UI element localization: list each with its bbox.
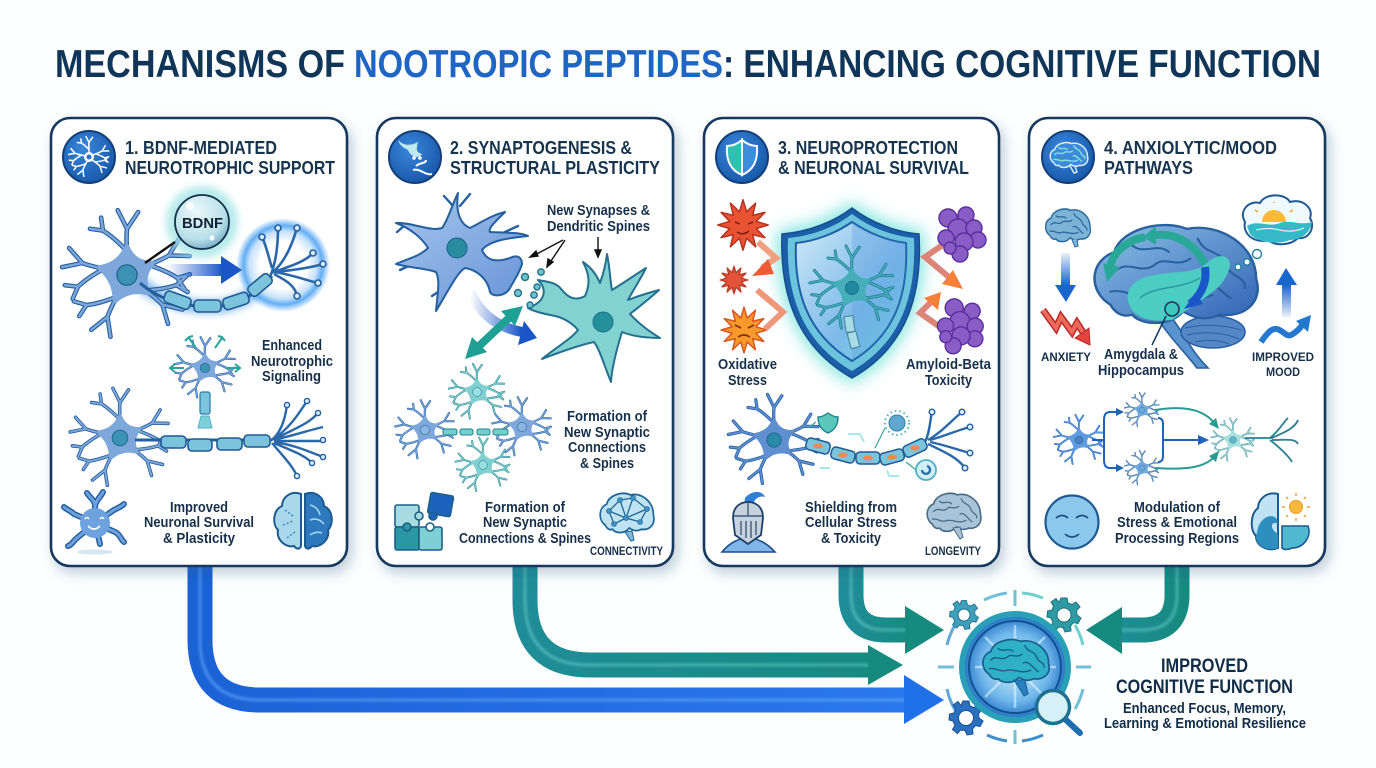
label: modulation of stress [1115, 500, 1239, 547]
icon: cell [916, 460, 936, 480]
magnifier [1036, 690, 1080, 733]
icon: synapse badge [389, 131, 441, 183]
label: new synapses and dendritic spines [547, 203, 650, 235]
label: new synapses and dendritic spines: Dendritic Spines [547, 219, 650, 235]
heading: 1. BDNF-MEDIATED [125, 137, 277, 158]
label: anxiety: ANXIETY [1041, 350, 1091, 364]
label: amyloid-beta toxicity [906, 357, 992, 389]
label: improved neuronal survival [144, 500, 254, 547]
heading: 3. NEUROPROTECTION [778, 137, 958, 158]
icon: calm face [1046, 496, 1098, 548]
label: oxidative stress: Stress [728, 373, 767, 389]
arrows: circular modulation [1103, 226, 1206, 309]
label: longevity: LONGEVITY [925, 544, 981, 558]
outcome text: improved cognitive function: Enhanced Focus, Memory, [1123, 701, 1286, 717]
icon: knight helmet [722, 492, 775, 552]
shield with neuron [778, 203, 923, 383]
arrow: anxiety zigzag [1043, 310, 1090, 345]
heading [778, 137, 969, 178]
heading: NEUROTROPHIC SUPPORT [125, 157, 336, 178]
icon: brain badge [1042, 131, 1094, 183]
label: formation of new synaptic connections: Connections [568, 440, 646, 456]
heading: 4. ANXIOLYTIC/MOOD [1104, 137, 1277, 158]
heading: 2. SYNAPTOGENESIS & [450, 137, 632, 158]
BDNF molecule: BDNF [182, 215, 223, 232]
small signaling neuron [170, 336, 240, 428]
title [55, 43, 1321, 86]
icon: smiling neuron [64, 492, 124, 554]
label: new synapses and dendritic spines: New Synapses & [547, 203, 650, 219]
central brain [1095, 225, 1258, 368]
outcome text: improved cognitive function: Learning & Emotional Resilience [1104, 716, 1306, 732]
panel 2: synaptogenesis and structural plasticity [377, 118, 673, 566]
label: enhanced neurotrophic signaling [251, 338, 333, 385]
outcome hub: brain with gears [938, 590, 1091, 744]
gears [949, 598, 1081, 735]
icon: puzzle [395, 492, 454, 550]
label: improved mood [1252, 350, 1314, 379]
neuron network [392, 364, 556, 492]
icon: connectivity brain [600, 493, 654, 541]
label: oxidative stress: Oxidative [718, 357, 777, 373]
label: shielding from cellular stress: Cellular Stress [805, 515, 897, 531]
long neuron [65, 388, 326, 487]
icon: shield badge [716, 131, 768, 183]
protected neuron [723, 394, 973, 485]
icon: anxious brain [1046, 209, 1090, 247]
label: modulation of stress: Stress & Emotional [1117, 515, 1237, 531]
outcome text: improved cognitive function: COGNITIVE FUNCTION [1116, 677, 1293, 698]
label: formation of connections and spines: Formation of [485, 500, 565, 516]
arrows: amyloid deflected [920, 242, 963, 327]
arrow: mood up [1276, 268, 1297, 317]
label: improved mood: IMPROVED [1252, 350, 1314, 364]
icon: wave brain with sun [1252, 493, 1310, 550]
label: enhanced neurotrophic signaling: Signaling [262, 369, 321, 385]
label: formation of new synaptic connections: & Spines [580, 456, 634, 472]
label: improved neuronal survival: & Plasticity [163, 531, 235, 547]
heading: STRUCTURAL PLASTICITY [450, 157, 661, 178]
icon: amyloid clusters [930, 207, 994, 362]
arrow: anxiety down [1055, 253, 1076, 302]
outcome text: improved cognitive function [1104, 656, 1306, 732]
heading [450, 137, 661, 178]
arrow: blue curved [470, 292, 537, 345]
icon: small shield [818, 413, 838, 433]
label: shielding from cellular stress [805, 500, 897, 547]
panel 4: anxiolytic and mood pathways [1029, 118, 1325, 566]
label: improved neuronal survival: Improved [170, 500, 228, 516]
label: improved neuronal survival: Neuronal Survival [144, 515, 254, 531]
label: amyloid-beta toxicity: Amyloid-Beta [906, 357, 992, 373]
presynaptic neuron [396, 193, 528, 311]
label: formation of connections and spines: Connections & Spines [459, 531, 591, 547]
label: improved mood: MOOD [1266, 365, 1300, 379]
icon: neuron badge [63, 131, 115, 183]
neural circuit diagram [1051, 392, 1298, 485]
label: modulation of stress: Modulation of [1134, 500, 1220, 516]
arrows: stress deflected [752, 242, 783, 329]
outcome text: improved cognitive function: IMPROVED [1161, 656, 1248, 677]
title: NOOTROPIC PEPTIDES [354, 43, 723, 86]
dashed ring [938, 590, 1091, 744]
hub disc [962, 614, 1068, 720]
label: connectivity: CONNECTIVITY [590, 544, 663, 558]
heading [125, 137, 336, 178]
label: enhanced neurotrophic signaling: Enhanced [262, 338, 322, 354]
label: formation of new synaptic connections [564, 409, 650, 472]
arrow: BDNF pathway to outcome [200, 560, 944, 724]
arrow: synaptogenesis pathway to outcome [525, 560, 903, 685]
label: amygdala and hippocampus [1098, 347, 1184, 379]
callout arrows: new synapses [530, 237, 601, 267]
label: formation of connections and spines: New Synaptic [483, 515, 567, 531]
label: enhanced neurotrophic signaling: Neurotrophic [251, 354, 333, 370]
panel 3: neuroprotection and neuronal survival [704, 118, 999, 566]
icon: longevity brain [927, 493, 981, 539]
icon: calm thought cloud [1235, 195, 1312, 270]
heading: & NEURONAL SURVIVAL [778, 157, 969, 178]
label: shielding from cellular stress: Shielding from [805, 500, 897, 516]
label: formation of new synaptic connections: Formation of [567, 409, 647, 425]
heading: PATHWAYS [1104, 157, 1193, 178]
arrow: teal double-headed [465, 306, 523, 359]
label: formation of connections and spines [459, 500, 591, 547]
panel 1: BDNF-mediated neurotrophic support [51, 118, 347, 566]
label: amygdala and hippocampus: Hippocampus [1098, 363, 1184, 379]
icon: split brain [274, 493, 332, 549]
hub brain [983, 640, 1049, 696]
icon: oxidative stress stars [718, 200, 768, 353]
BDNF molecule [145, 186, 238, 263]
title: MECHANISMS OF [55, 43, 345, 86]
arrow: signal direction [167, 256, 242, 284]
postsynaptic neuron [514, 254, 660, 382]
heading [1104, 137, 1277, 178]
label: modulation of stress: Processing Regions [1115, 531, 1239, 547]
label: shielding from cellular stress: & Toxicity [821, 531, 881, 547]
label: oxidative stress [718, 357, 777, 389]
arrow: mood pathway to outcome [1086, 560, 1177, 654]
label: amyloid-beta toxicity: Toxicity [925, 373, 972, 389]
arrow: neuroprotection pathway to outcome [851, 560, 944, 654]
label: amygdala and hippocampus: Amygdala & [1104, 347, 1178, 363]
neuron receiving BDNF [55, 210, 330, 338]
label: formation of new synaptic connections: New Synaptic [564, 425, 650, 441]
icon: virus [885, 411, 909, 435]
arrow: rising mood line [1261, 315, 1311, 342]
